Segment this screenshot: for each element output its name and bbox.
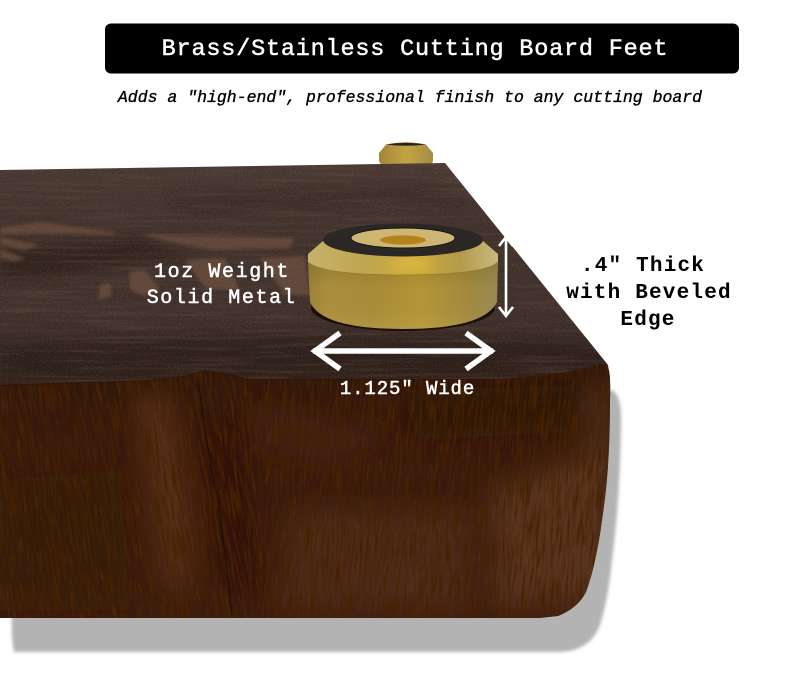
foot contact shadow [311,285,495,331]
foot inner brass [351,228,455,248]
foot bevel [308,241,498,275]
slanted wood grain [0,371,260,618]
label: weight [147,261,296,310]
foot centre hole [380,235,426,245]
foot cylinder wall [308,262,498,329]
board front face [0,364,610,618]
main dark grain line [198,378,232,615]
label: width: 1.125" Wide [340,378,475,400]
label: thickness [566,255,732,332]
wood figure patches on top surface [0,222,310,300]
thickness arrow [499,237,513,316]
width arrow [313,333,493,369]
label: thickness: .4" Thick [581,255,705,278]
board top surface [0,160,612,395]
subtitle: Adds a "high-end", professional finish to any cutting board [117,88,702,107]
label: thickness: Edge [620,309,676,332]
large brass foot [308,224,498,331]
label: thickness: with Beveled [566,282,732,305]
label: weight: 1oz Weight [154,261,290,284]
foot rubber ring [323,224,483,256]
small rear brass foot [379,142,433,166]
darker tones on top surface [0,185,600,378]
title text: Brass/Stainless Cutting Board Feet [162,36,668,63]
board shadow [12,390,621,652]
lighter and darker wood tones on front face [130,384,610,615]
title banner [105,24,739,74]
label: weight: Solid Metal [147,287,296,310]
